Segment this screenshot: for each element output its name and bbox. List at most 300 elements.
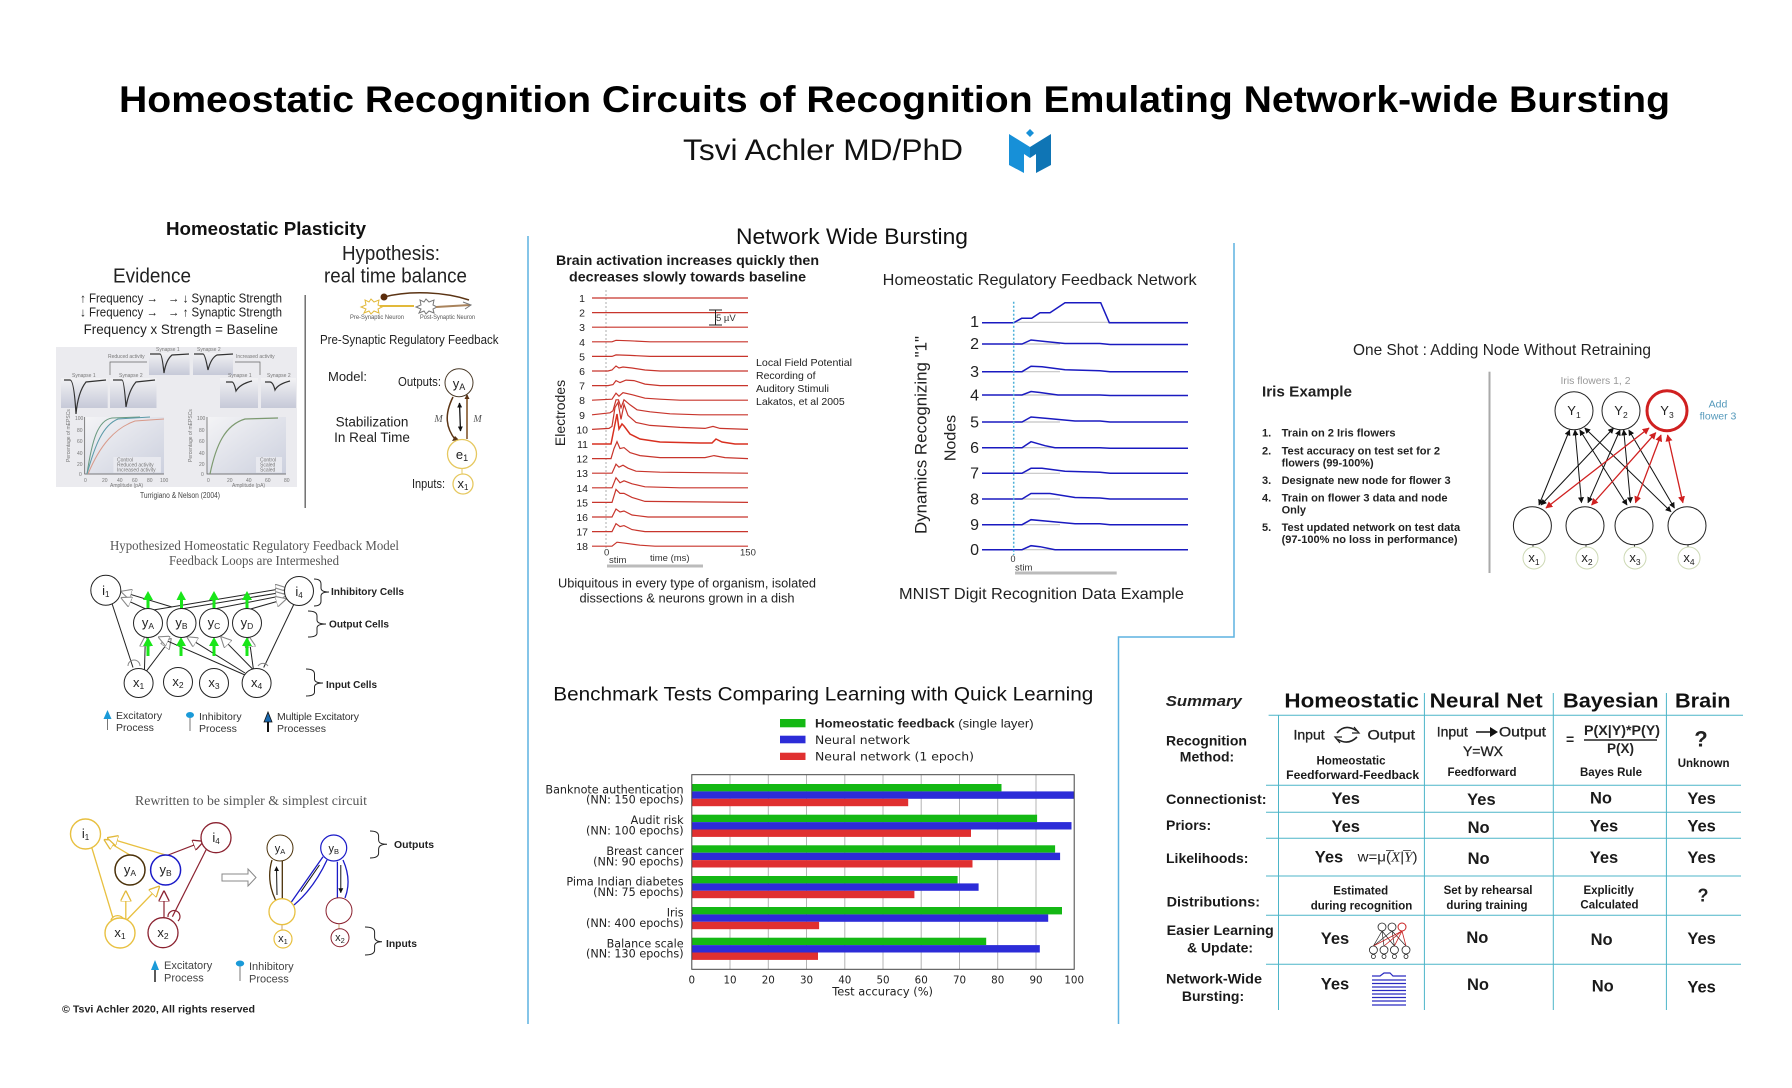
network-wide bursting row: No <box>1467 976 1489 994</box>
diagram: iris network: 2 <box>1588 557 1593 567</box>
network-wide bursting row: Yes <box>1687 978 1716 996</box>
chart: node dynamics: 2 <box>970 336 979 353</box>
chart: synapse evidence figure: 20 <box>227 478 233 484</box>
connectionist row: Yes <box>1467 791 1496 809</box>
heading: Benchmark Tests Comparing Learning with Quick Learning <box>553 684 1093 706</box>
network-wide bursting row: No <box>1592 978 1614 996</box>
chart: synapse evidence figure: 40 <box>246 478 252 484</box>
chart: local field potential traces: 17 <box>576 527 588 539</box>
panel dividers <box>528 236 1234 1024</box>
model labels: Model: <box>328 369 367 384</box>
bar chart: Pima Indian diabetes <box>566 876 684 889</box>
cell type labels <box>326 586 404 691</box>
frequency relations: ↑ Frequency → <box>80 292 158 306</box>
diagram: intermeshed network: x <box>208 675 215 690</box>
panel: benchmark tests <box>545 684 1093 999</box>
steps list: 1. <box>1262 428 1271 440</box>
bar chart: Breast cancer <box>606 845 684 858</box>
chart: synapse evidence figure: 40 <box>199 451 205 457</box>
icon: logo <box>1009 129 1051 173</box>
steps list: (97-100% no loss in performance) <box>1282 534 1458 546</box>
diagram: intermeshed network: 1 <box>139 681 144 691</box>
diagram: simplest circuit: 2 <box>341 936 345 945</box>
diagram: iris network: Y <box>1567 403 1576 418</box>
icon: neurons: Post-Synaptic Neuron <box>420 314 475 321</box>
cell type labels: Output Cells <box>329 619 389 631</box>
chart: synapse evidence figure: 0 <box>79 472 82 478</box>
chart: local field potential traces: 9 <box>579 410 585 422</box>
row labels: Recognition <box>1166 733 1247 749</box>
steps list: 4. <box>1262 493 1271 505</box>
bar chart: 0 <box>689 974 695 986</box>
bar chart: (NN: 130 epochs) <box>586 948 684 961</box>
diagram: coloured circuit: 1 <box>85 833 90 842</box>
distributions row: Set by rehearsal <box>1444 885 1532 897</box>
easier learning row: Yes <box>1321 930 1349 948</box>
diagram: iris network: flower 3 <box>1700 411 1737 423</box>
diagram: intermeshed network: 1 <box>105 590 110 599</box>
chart: synapse evidence figure: Reduced activity <box>108 354 145 360</box>
distributions row: during training <box>1446 900 1528 912</box>
chart: node dynamics: 1 <box>970 314 979 331</box>
priors row <box>1331 818 1716 837</box>
diagram: iris network: 4 <box>1690 557 1695 567</box>
diagram: intermeshed network: x <box>251 675 257 690</box>
diagram: iris network: Add <box>1709 399 1727 411</box>
diagram: intermeshed network: 4 <box>257 681 262 691</box>
frequency relations: → ↓ Synaptic Strength <box>168 292 282 306</box>
steps list: 2. <box>1262 445 1271 457</box>
bar chart: 90 <box>1029 974 1043 986</box>
recognition method: bayesian: Bayes Rule <box>1580 767 1642 779</box>
bar chart: (NN: 100 epochs) <box>586 824 684 838</box>
hypothesis heading: Hypothesis: <box>342 242 440 265</box>
diagram: simplest circuit: y <box>275 843 280 855</box>
bar chart: Test accuracy (%) <box>831 985 933 999</box>
diagram: coloured circuit: 2 <box>164 931 169 941</box>
diagram: iris network: 3 <box>1669 410 1674 420</box>
bar chart: 50 <box>876 974 890 986</box>
recognition method: bayesian: = <box>1566 731 1574 747</box>
likelihoods row <box>1315 849 1716 868</box>
row labels: Method: <box>1180 749 1234 765</box>
diagram: simplest circuit: 1 <box>284 937 288 946</box>
steps list: Train on flower 3 data and node <box>1282 493 1448 505</box>
chart: local field potential traces <box>552 290 756 568</box>
network-wide bursting row: Yes <box>1321 976 1349 994</box>
divider <box>304 295 306 508</box>
model labels: Stabilization <box>336 415 408 430</box>
caption: MNIST: MNIST Digit Recognition Data Example <box>899 586 1184 603</box>
steps list: Test accuracy on test set for 2 <box>1282 445 1440 457</box>
hypothesis heading: real time balance <box>324 265 467 288</box>
recognition method: brain <box>1678 727 1729 770</box>
panel: summary table <box>1166 690 1743 1010</box>
chart: local field potential traces: 16 <box>576 512 588 524</box>
chart: synapse evidence figure: Amplitude (pA) <box>110 483 143 489</box>
model labels: Outputs: <box>398 375 441 389</box>
diagram: simplest circuit: A <box>280 847 285 856</box>
priors row: Yes <box>1590 818 1618 836</box>
column headers: Brain <box>1675 690 1730 712</box>
column headers <box>1166 690 1730 712</box>
diagram: simplest circuit: y <box>328 843 334 855</box>
chart: synapse evidence figure: 20 <box>102 478 108 484</box>
chart: synapse evidence figure: 100 <box>75 416 84 422</box>
heading: One Shot : Adding Node Without Retraining <box>1353 342 1651 359</box>
steps list: flowers (99-100%) <box>1282 457 1374 469</box>
chart: node dynamics: 8 <box>970 492 979 508</box>
bar chart: 10 <box>723 974 737 986</box>
chart: synapse evidence figure: Percentage of mEPSCs <box>66 409 72 462</box>
frequency relations: ↓ Frequency → <box>80 306 158 320</box>
panel: feedback model <box>91 538 404 735</box>
hypothesis heading <box>324 242 467 288</box>
legend: process types: Inhibitory <box>199 711 242 723</box>
diagram: iris network: 1 <box>1535 557 1540 567</box>
chart: synapse evidence figure: Increased activity <box>117 468 156 474</box>
recognition method: homeostatic: Output <box>1368 726 1415 742</box>
row labels: Likelihoods: <box>1166 850 1248 866</box>
bar chart <box>545 775 1084 999</box>
cell type braces <box>306 579 329 696</box>
recognition method: homeostatic: Input <box>1294 726 1325 742</box>
icon: neurons: Pre-Synaptic Neuron <box>350 314 404 321</box>
chart: local field potential traces: 1 <box>579 293 585 305</box>
chart: synapse evidence figure: Synapse 1 <box>228 373 252 379</box>
legend <box>780 716 1034 764</box>
row labels <box>1166 733 1274 1004</box>
priors row: Yes <box>1331 818 1360 836</box>
caption: Ubiquitous in every type of organism, isolated <box>558 577 816 591</box>
annotation: recording note: Auditory Stimuli <box>756 383 829 395</box>
chart: local field potential traces: 150 <box>740 548 756 559</box>
chart: node dynamics: 0 <box>1010 554 1016 564</box>
easier learning row <box>1321 923 1716 958</box>
chart: local field potential traces: 11 <box>577 439 588 451</box>
distributions row <box>1311 885 1708 913</box>
row labels: Distributions: <box>1167 893 1260 909</box>
frequency relations: → ↑ Synaptic Strength <box>168 306 282 320</box>
chart: local field potential traces: 14 <box>576 483 588 495</box>
chart: synapse evidence figure: Scaled <box>260 468 276 474</box>
diagram: coloured circuit: 4 <box>215 837 220 846</box>
frequency relations <box>80 292 282 337</box>
chart: synapse evidence figure: 0 <box>84 478 87 484</box>
diagram: model circuit: x <box>458 476 464 491</box>
column headers: Homeostatic <box>1284 690 1419 712</box>
chart: synapse evidence figure: Control <box>117 458 133 464</box>
copyright: © Tsvi Achler 2020, All rights reserved <box>62 1004 255 1016</box>
recognition method: homeostatic: Feedforward-Feedback <box>1286 770 1420 782</box>
connectionist row <box>1331 790 1716 809</box>
chart: local field potential traces: 6 <box>579 366 585 378</box>
labels: outputs and inputs <box>386 839 434 950</box>
chart: synapse evidence figure: 60 <box>199 439 205 445</box>
bar chart: 60 <box>915 974 928 986</box>
bar chart: 100 <box>1064 974 1084 986</box>
diagram: intermeshed network: C <box>214 621 220 631</box>
bar chart: (NN: 400 epochs) <box>586 917 684 930</box>
bar chart: (NN: 150 epochs) <box>586 794 684 807</box>
legend: Homeostatic feedback (single layer) <box>815 716 1034 730</box>
chart: local field potential traces: 12 <box>576 454 588 466</box>
chart: local field potential traces: 8 <box>579 395 585 407</box>
legend: process types: Process <box>116 722 154 734</box>
citation: Turrigiano & Nelson (2004) <box>140 491 220 500</box>
chart: synapse evidence figure: Control <box>260 458 276 464</box>
chart: local field potential traces: time (ms) <box>650 553 690 564</box>
diagram: simplest circuit: x <box>335 932 341 944</box>
likelihoods row: No <box>1468 850 1490 868</box>
chart: synapse evidence figure: Scaled <box>260 462 276 468</box>
recognition method: neural net <box>1437 724 1546 779</box>
easier learning row: Yes <box>1687 930 1716 948</box>
chart: synapse evidence figure <box>56 347 297 489</box>
chart: local field potential traces: 18 <box>576 541 588 553</box>
recognition method: bayesian: P(X|Y)*P(Y) <box>1584 723 1660 738</box>
recognition method: homeostatic: Homeostatic <box>1316 755 1386 767</box>
diagram: iris network <box>1513 375 1737 569</box>
steps list: 5. <box>1262 522 1271 534</box>
diagram: intermeshed network: D <box>247 621 253 631</box>
heading: Feedback Loops are Intermeshed <box>169 553 339 568</box>
diagram: model circuit: e <box>456 447 463 462</box>
chart: synapse evidence figure: 40 <box>77 451 83 457</box>
legend: process types: Process <box>249 974 289 986</box>
recognition method: neural net: Input <box>1437 724 1468 740</box>
diagram: coloured circuit <box>70 819 231 948</box>
title: Homeostatic Recognition Circuits of Recognition Emulating Network-wide Bursting <box>119 79 1670 120</box>
chart: synapse evidence figure: Synapse 1 <box>72 373 96 379</box>
chart: synapse evidence figure: 100 <box>197 416 206 422</box>
diagram: coloured circuit: 1 <box>121 931 126 941</box>
legend: process types: Excitatory <box>116 710 163 722</box>
steps list: 3. <box>1262 475 1271 487</box>
diagram: intermeshed network: A <box>148 621 154 631</box>
bar chart: 40 <box>838 974 851 986</box>
legend: process types: Process <box>199 723 237 735</box>
panel: network wide bursting <box>552 224 1198 606</box>
chart: local field potential traces: 5 µV <box>716 313 736 324</box>
cell type labels: Inhibitory Cells <box>331 586 404 598</box>
connectionist row: Yes <box>1687 790 1716 808</box>
panel: homeostatic plasticity <box>56 219 499 508</box>
chart: local field potential traces: 10 <box>576 424 588 436</box>
recognition method: neural net: Feedforward <box>1447 767 1517 779</box>
diagram: intermeshed network <box>91 575 314 698</box>
chart: local field potential traces: 3 <box>579 322 585 334</box>
bar chart: 30 <box>800 974 813 986</box>
caption <box>558 577 816 606</box>
panel: simplified circuit <box>62 794 434 1016</box>
diagram: iris network: 2 <box>1623 410 1628 420</box>
chart: synapse evidence figure: Synapse 1 <box>156 347 180 353</box>
legend: Neural network <box>815 733 910 747</box>
bar chart: Balance scale <box>607 937 684 950</box>
chart: synapse evidence figure: 60 <box>77 439 83 445</box>
diagram: intermeshed network: i <box>295 584 298 599</box>
chart: local field potential traces: 5 <box>579 351 585 363</box>
legend: process types: Excitatory <box>164 960 213 972</box>
author: Tsvi Achler MD/PhD <box>683 134 963 167</box>
diagram: model circuit: M <box>433 414 443 425</box>
legend: Neural network (1 epoch) <box>815 750 974 764</box>
chart: node dynamics: 3 <box>970 364 979 381</box>
diagram: coloured circuit: x <box>157 925 164 940</box>
row labels: Bursting: <box>1182 988 1244 1004</box>
chart: local field potential traces: Electrodes <box>552 380 568 446</box>
diagram: intermeshed network: i <box>102 583 105 598</box>
distributions row: Explicitly <box>1583 885 1635 897</box>
chart: node dynamics: stim <box>1015 563 1032 574</box>
subheading: Iris Example <box>1262 384 1352 401</box>
chart: local field potential traces: 2 <box>579 308 585 320</box>
bar chart: Audit risk <box>631 814 684 827</box>
heading: Network Wide Bursting <box>736 224 968 249</box>
steps list: Test updated network on test data <box>1282 522 1461 534</box>
recognition method: brain: ? <box>1694 727 1708 752</box>
chart: synapse evidence figure: Amplitude (pA) <box>232 483 265 489</box>
steps list: Designate new node for flower 3 <box>1282 475 1451 487</box>
diagram: iris network: 3 <box>1636 557 1641 567</box>
arrow: simplification <box>222 869 256 886</box>
diagram: intermeshed network: B <box>182 621 188 631</box>
connectionist row: No <box>1590 790 1612 808</box>
steps list <box>1262 428 1461 546</box>
chart: synapse evidence figure: Reduced activity <box>117 462 154 468</box>
chart: synapse evidence figure: Percentage of mEPSCs <box>188 409 194 462</box>
recognition method: brain: Unknown <box>1678 758 1729 770</box>
diagram: intermeshed network: y <box>241 615 247 630</box>
diagram: model circuit: 1 <box>463 453 468 463</box>
model labels: In Real Time <box>334 430 410 445</box>
diagram: iris network: Y <box>1660 403 1669 418</box>
bar chart: (NN: 75 epochs) <box>593 886 684 899</box>
chart: synapse evidence figure: 40 <box>117 478 123 484</box>
steps list: Only <box>1282 505 1307 517</box>
chart: node dynamics: Nodes <box>943 415 960 461</box>
chart: local field potential traces: 0 <box>604 548 609 559</box>
icon: feedback loop <box>1335 727 1359 743</box>
likelihoods row: Yes <box>1315 849 1343 867</box>
chart: synapse evidence figure: 80 <box>77 428 83 434</box>
diagram: coloured circuit: B <box>166 868 172 878</box>
diagram: intermeshed network: x <box>172 674 179 689</box>
diagram: model circuit: 1 <box>464 483 469 492</box>
divider <box>1488 372 1490 573</box>
bar chart: 80 <box>991 974 1004 986</box>
priors row: No <box>1468 819 1490 837</box>
legend: process types: Process <box>164 973 204 985</box>
chart: node dynamics: 5 <box>970 414 979 432</box>
column headers: Summary <box>1166 693 1243 710</box>
diagram: iris network: Y <box>1614 403 1623 418</box>
chart: synapse evidence figure: Synapse 2 <box>197 347 221 353</box>
easier learning row: No <box>1466 929 1488 947</box>
connectionist row: Yes <box>1331 790 1360 808</box>
chart: synapse evidence figure: 80 <box>284 478 290 484</box>
column headers: Neural Net <box>1430 690 1543 712</box>
diagram: model circuit: A <box>459 382 465 392</box>
labels: outputs and inputs: Inputs <box>386 938 417 950</box>
diagram: iris network: x <box>1581 550 1588 565</box>
legend: process types: Processes <box>277 723 326 735</box>
recognition method: bayesian <box>1566 723 1660 779</box>
subheading: decreases slowly towards baseline <box>569 270 807 285</box>
legend: process types <box>104 710 360 735</box>
chart: node dynamics: 7 <box>970 466 979 482</box>
recognition method: neural net: Output <box>1499 724 1546 740</box>
diagram: coloured circuit: y <box>160 862 166 877</box>
icon: mini network <box>1369 923 1410 958</box>
heading: Rewritten to be simpler & simplest circuit <box>135 794 367 809</box>
diagram: coloured circuit: i <box>212 830 215 845</box>
column headers: Bayesian <box>1563 690 1658 712</box>
distributions row: ? <box>1698 886 1708 906</box>
bar chart: 70 <box>953 974 966 986</box>
diagram: model circuit: y <box>453 376 459 391</box>
chart: local field potential traces: 4 <box>579 337 585 349</box>
diagram: simplest circuit: B <box>334 847 339 856</box>
easier learning row: No <box>1591 931 1613 949</box>
diagram: intermeshed network: 2 <box>179 680 184 690</box>
bar chart: Iris <box>667 906 684 920</box>
steps list: Train on 2 Iris flowers <box>1282 428 1396 440</box>
subheading: network chart: Homeostatic Regulatory Feedback Network <box>883 272 1198 289</box>
chart: synapse evidence figure: 100 <box>160 478 169 484</box>
table grid <box>1266 693 1743 1010</box>
recognition method: neural net: Y=WX <box>1463 743 1504 759</box>
chart: node dynamics: 0 <box>970 542 979 559</box>
legend: process types: Multiple Excitatory <box>277 711 360 723</box>
diagram: intermeshed network: x <box>133 675 139 690</box>
icon: mini bursting traces <box>1372 973 1406 1005</box>
chart: node dynamics: 6 <box>970 440 979 457</box>
diagram: model circuit <box>433 369 482 494</box>
model labels: Inputs: <box>412 477 445 491</box>
evidence heading: Evidence <box>113 265 191 288</box>
annotation: recording note: Lakatos, et al 2005 <box>756 396 845 408</box>
model labels <box>328 369 445 491</box>
row labels: & Update: <box>1187 939 1253 955</box>
heading: Homeostatic Plasticity <box>166 219 366 239</box>
annotation: recording note <box>756 357 852 408</box>
chart: node dynamics: Dynamics Recognizing "1" <box>912 336 931 534</box>
braces: outputs and inputs <box>365 831 387 955</box>
diagram: iris network: x <box>1629 550 1636 565</box>
diagram: intermeshed network: 4 <box>298 591 303 600</box>
chart: synapse evidence figure: 80 <box>147 478 153 484</box>
diagram: coloured circuit: A <box>130 868 136 878</box>
priors row: Yes <box>1687 818 1716 836</box>
diagram: coloured circuit: i <box>82 826 85 841</box>
panel: one shot <box>1262 342 1737 573</box>
likelihoods row: w=μ( X|Y) <box>1356 850 1418 865</box>
chart: node dynamics: 4 <box>970 388 979 404</box>
diagram: simplest circuit: x <box>278 933 284 945</box>
distributions row: Calculated <box>1580 900 1639 912</box>
chart: node dynamics <box>912 302 1188 574</box>
chart: node dynamics: 9 <box>970 517 979 534</box>
legend: process types <box>151 960 294 986</box>
bar chart: 20 <box>762 974 775 986</box>
row labels: Easier Learning <box>1167 922 1274 938</box>
caption: dissections & neurons grown in a dish <box>580 592 795 606</box>
chart: synapse evidence figure: 60 <box>132 478 138 484</box>
heading: Hypothesized Homeostatic Regulatory Feedback Model <box>110 538 399 553</box>
chart: synapse evidence figure: 0 <box>207 478 210 484</box>
